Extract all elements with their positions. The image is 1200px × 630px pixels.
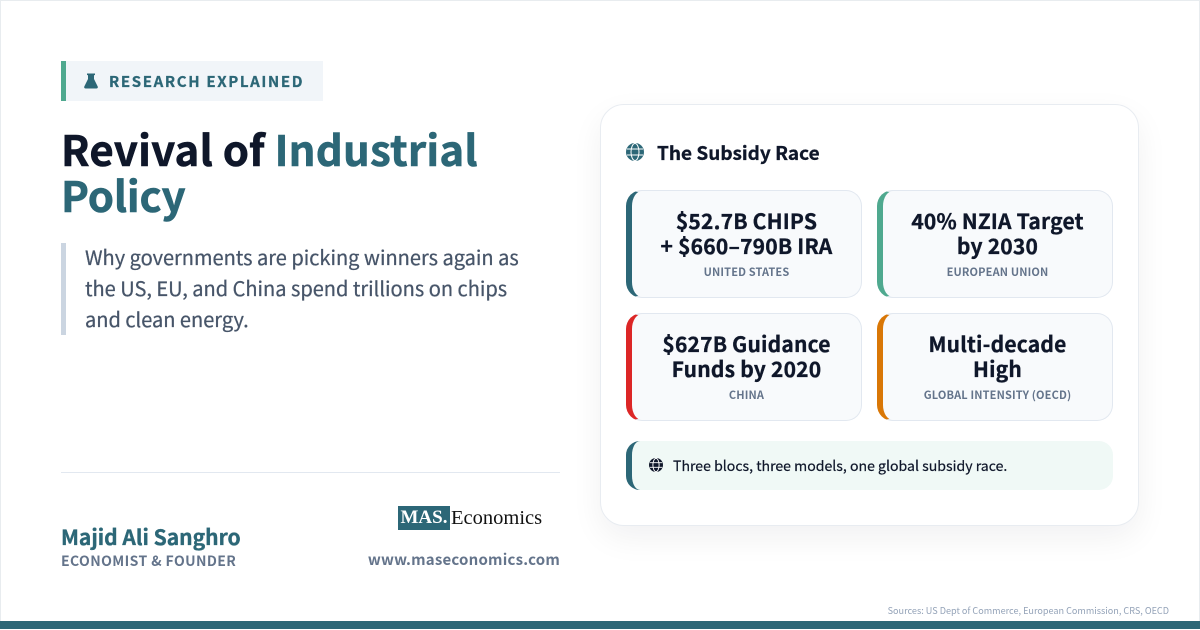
subtitle text: Why governments are picking winners again as — [85, 242, 519, 271]
value: + $660–790B IRA — [661, 231, 832, 261]
badge: research explained — [61, 61, 323, 101]
value: $627B Guidance — [662, 329, 831, 359]
title: Revival of Industrial — [61, 118, 478, 179]
value: Funds by 2020 — [672, 354, 821, 384]
icon: globe small — [649, 458, 663, 472]
region: EUROPEAN UNION — [947, 264, 1048, 280]
subtitle text: and clean energy. — [85, 304, 249, 333]
value — [911, 206, 1084, 261]
value: $52.7B CHIPS — [676, 206, 817, 236]
title — [61, 118, 478, 224]
panel heading: The Subsidy Race — [657, 139, 820, 166]
bottom bar — [0, 621, 1200, 629]
value — [661, 206, 832, 261]
sources: Sources: US Dept of Commerce, European Commission, CRS, OECD — [888, 603, 1169, 617]
website: www.maseconomics.com — [368, 549, 560, 570]
title: Policy — [61, 164, 185, 224]
logo wordmark: Economics — [451, 507, 542, 529]
card: china — [626, 313, 862, 421]
card: european union — [877, 190, 1113, 298]
region: CHINA — [729, 387, 764, 403]
author role: ECONOMIST & FOUNDER — [61, 551, 236, 571]
icon: globe — [626, 143, 644, 161]
author name: Majid Ali Sanghro — [61, 522, 241, 552]
value — [662, 329, 831, 384]
card: united states — [626, 190, 862, 298]
subtitle text: the US, EU, and China spend trillions on chips — [85, 273, 507, 302]
callout text: Three blocs, three models, one global subsidy race. — [673, 456, 1007, 476]
region: UNITED STATES — [704, 264, 789, 280]
card: global intensity — [877, 313, 1113, 421]
badge accent — [61, 61, 66, 101]
value: 40% NZIA Target — [911, 206, 1084, 236]
value: Multi-decade — [928, 329, 1066, 359]
callout — [626, 441, 1113, 490]
subtitle quote — [61, 243, 516, 335]
logo: MAS Economics — [398, 506, 542, 530]
value: High — [973, 354, 1022, 384]
value: by 2030 — [957, 231, 1038, 261]
panel: the subsidy race — [600, 104, 1139, 526]
subtitle text — [85, 242, 519, 333]
logo mark: MAS. — [400, 507, 447, 528]
region: GLOBAL INTENSITY (OECD) — [924, 387, 1071, 403]
value — [928, 329, 1066, 384]
badge text: RESEARCH EXPLAINED — [109, 71, 304, 92]
icon: flask — [84, 74, 98, 88]
